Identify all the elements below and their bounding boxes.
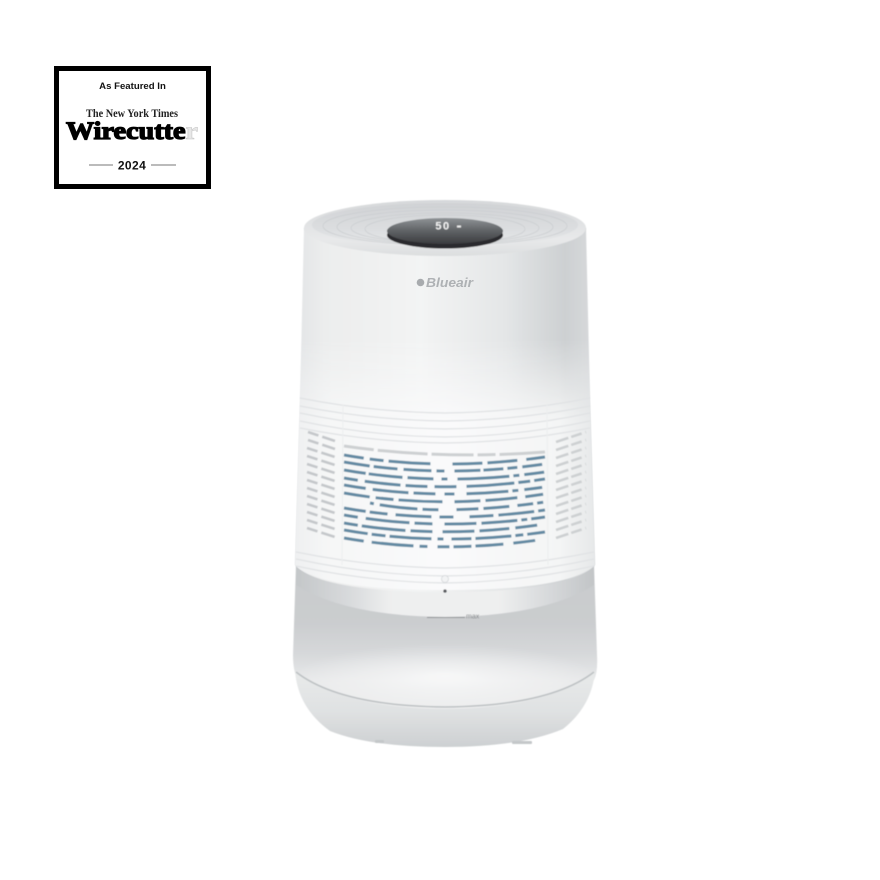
display dial bbox=[387, 218, 503, 248]
mesh section bbox=[295, 340, 595, 593]
air outlet rings bbox=[323, 207, 567, 245]
feet bbox=[375, 740, 532, 744]
top rim bbox=[304, 200, 586, 256]
tank bbox=[293, 565, 597, 717]
horizontal ribs bbox=[296, 398, 594, 583]
max line: max bbox=[466, 614, 480, 620]
max line bbox=[427, 614, 480, 620]
Wirecutter wordmark: Wirecutte r bbox=[66, 118, 198, 145]
right side slots bbox=[556, 432, 586, 538]
upper body bbox=[295, 228, 595, 592]
base bbox=[295, 671, 595, 747]
water tank and base bbox=[293, 565, 597, 747]
base seam bbox=[296, 672, 594, 707]
recessed top bbox=[312, 203, 578, 247]
Blueair logo: Blueair bbox=[426, 276, 474, 290]
panel dividers bbox=[342, 405, 548, 565]
year with rules: 2024 bbox=[118, 158, 146, 172]
central filter slots bbox=[344, 455, 545, 547]
humidity readout: 50 bbox=[435, 220, 451, 232]
badge heading: As Featured In bbox=[99, 81, 166, 92]
tank button and indicator bbox=[442, 576, 448, 593]
tank upper band bbox=[296, 565, 594, 617]
newspaper name: The New York Times bbox=[86, 108, 178, 120]
top slot row bbox=[344, 446, 545, 455]
tank highlights bbox=[295, 644, 595, 708]
left side slots bbox=[307, 432, 335, 537]
year with rules bbox=[89, 158, 176, 172]
humidifier product bbox=[293, 200, 597, 747]
badge: As Featured In The New York Times Wirecutter 2024 bbox=[56, 68, 208, 186]
